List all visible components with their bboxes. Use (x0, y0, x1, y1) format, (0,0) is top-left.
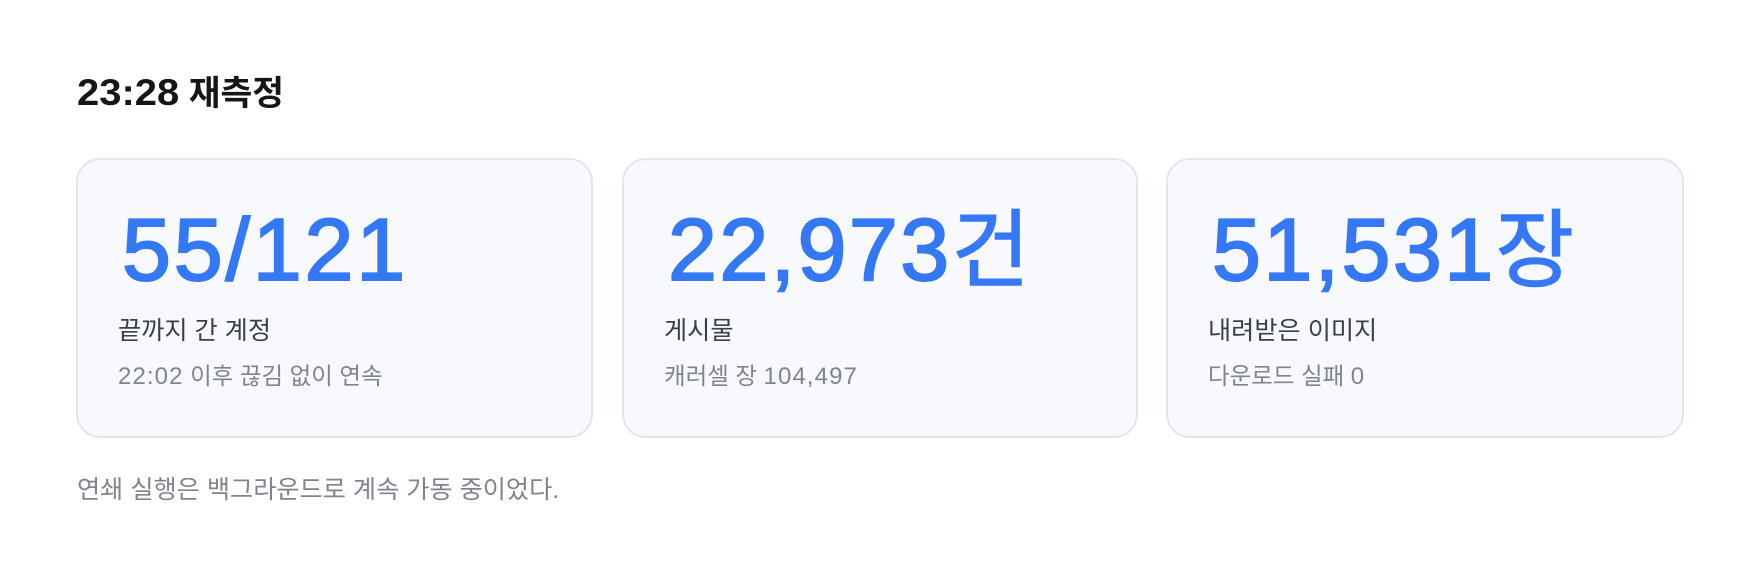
stat note: accounts: 22:02 이후 끊김 없이 연속 (118, 363, 383, 390)
stat note: posts: 캐러셀 장 104,497 (664, 363, 858, 390)
panel: accounts completed (76, 158, 593, 438)
stat label: posts: 게시물 (664, 317, 734, 345)
stat number: accounts: 55/121 (122, 200, 408, 299)
title: 재측정 (189, 75, 284, 113)
panel: posts (622, 158, 1138, 438)
footnote: 연쇄 실행은 백그라운드로 계속 가동 중이었다. (77, 476, 559, 504)
stat label: accounts: 끝까지 간 계정 (118, 317, 271, 345)
stat label: images: 내려받은 이미지 (1208, 317, 1377, 345)
title: 23:28 (77, 72, 179, 113)
title (77, 72, 284, 113)
stat number: posts: 22,973건 (668, 200, 1030, 299)
panel: images (1166, 158, 1684, 438)
stat number: images: 51,531장 (1212, 200, 1574, 299)
stat note: images: 다운로드 실패 0 (1208, 363, 1365, 390)
